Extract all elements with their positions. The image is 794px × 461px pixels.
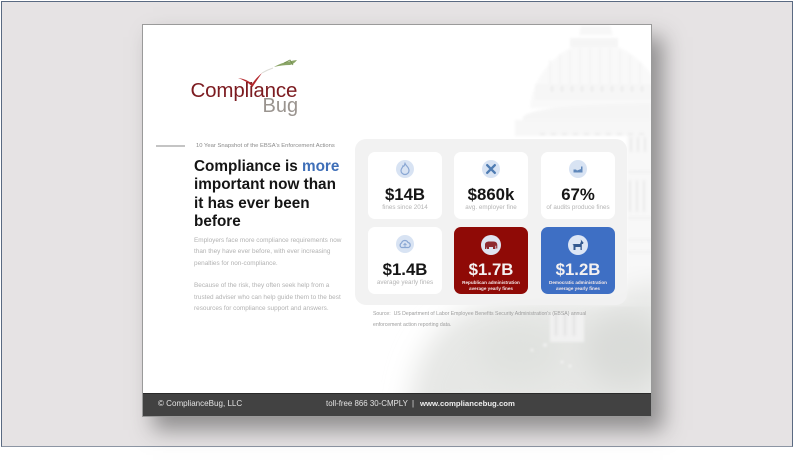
body paragraph 2: Because of the risk, they often seek help from a — [194, 282, 329, 289]
value: $14B — [385, 185, 425, 204]
caption: of audits produce fines — [546, 204, 610, 211]
caption: avg. employer fine — [465, 204, 517, 211]
capitol background photo — [406, 39, 651, 393]
caption: Democratic administration — [549, 280, 607, 284]
icon: cross — [482, 160, 500, 178]
icon: grasshopper and check mark — [238, 60, 297, 87]
footer divider: | — [412, 399, 414, 408]
caption — [462, 280, 520, 291]
caption — [549, 280, 607, 291]
slide — [142, 24, 652, 417]
source note: Source: US Department of Labor Employee Benefits Security Administration's (EBSA) annual — [373, 311, 586, 317]
caption: Republican administration — [462, 280, 520, 284]
body paragraph 1: penalties for non-compliance. — [194, 260, 278, 267]
logo word: Bug: Bug — [262, 95, 298, 117]
value: 67% — [561, 185, 595, 204]
caption: average yearly fines — [469, 286, 513, 291]
main heading: important now than — [194, 176, 336, 193]
icon: donkey — [568, 235, 588, 255]
eyebrow text: 10 Year Snapshot of the EBSA's Enforcement Actions — [196, 143, 335, 149]
logo word: Compliance: Compliance — [190, 79, 297, 102]
body paragraph 2: resources for compliance support and answers. — [194, 305, 329, 312]
caption: fines since 2014 — [382, 204, 428, 211]
body paragraph 2 — [194, 282, 341, 312]
footer bar — [142, 393, 652, 417]
icon: chart — [569, 160, 587, 178]
main heading: before — [194, 213, 241, 230]
source note: enforcement action reporting data. — [373, 322, 451, 328]
value: $1.7B — [469, 260, 513, 279]
main heading: it has ever been — [194, 194, 310, 212]
logo — [190, 60, 298, 117]
card: average employer fine — [454, 152, 528, 219]
source note — [373, 311, 586, 328]
icon: flame — [396, 160, 414, 178]
body paragraph 2: trusted adviser who can help guide them to the best — [194, 294, 341, 300]
value: $1.4B — [383, 260, 427, 279]
caption: average yearly fines — [377, 279, 433, 286]
decorative rule label — [156, 145, 185, 146]
body paragraph 1: than they have ever before, with ever increasing — [194, 248, 330, 255]
value: $860k — [468, 185, 514, 204]
card: Democratic administration — [541, 227, 615, 294]
icon: elephant — [481, 235, 501, 255]
card: average yearly fines — [368, 227, 442, 294]
stats panel — [355, 139, 627, 305]
body paragraph 1: Employers face more compliance requirements now — [194, 237, 341, 244]
footer copyright: © ComplianceBug, LLC — [158, 399, 242, 408]
icon: cloud — [396, 235, 414, 253]
value: $1.2B — [556, 260, 600, 279]
card: audits produce fines — [541, 152, 615, 219]
body paragraph 1 — [194, 237, 342, 267]
main heading: Compliance is more — [194, 158, 339, 174]
footer website: www.compliancebug.com — [420, 399, 515, 408]
caption: average yearly fines — [556, 286, 600, 291]
card: fines since 2014 — [368, 152, 442, 219]
main heading — [194, 158, 339, 230]
footer phone: toll-free 866 30-CMPLY — [326, 399, 408, 408]
card: Republican administration — [454, 227, 528, 294]
